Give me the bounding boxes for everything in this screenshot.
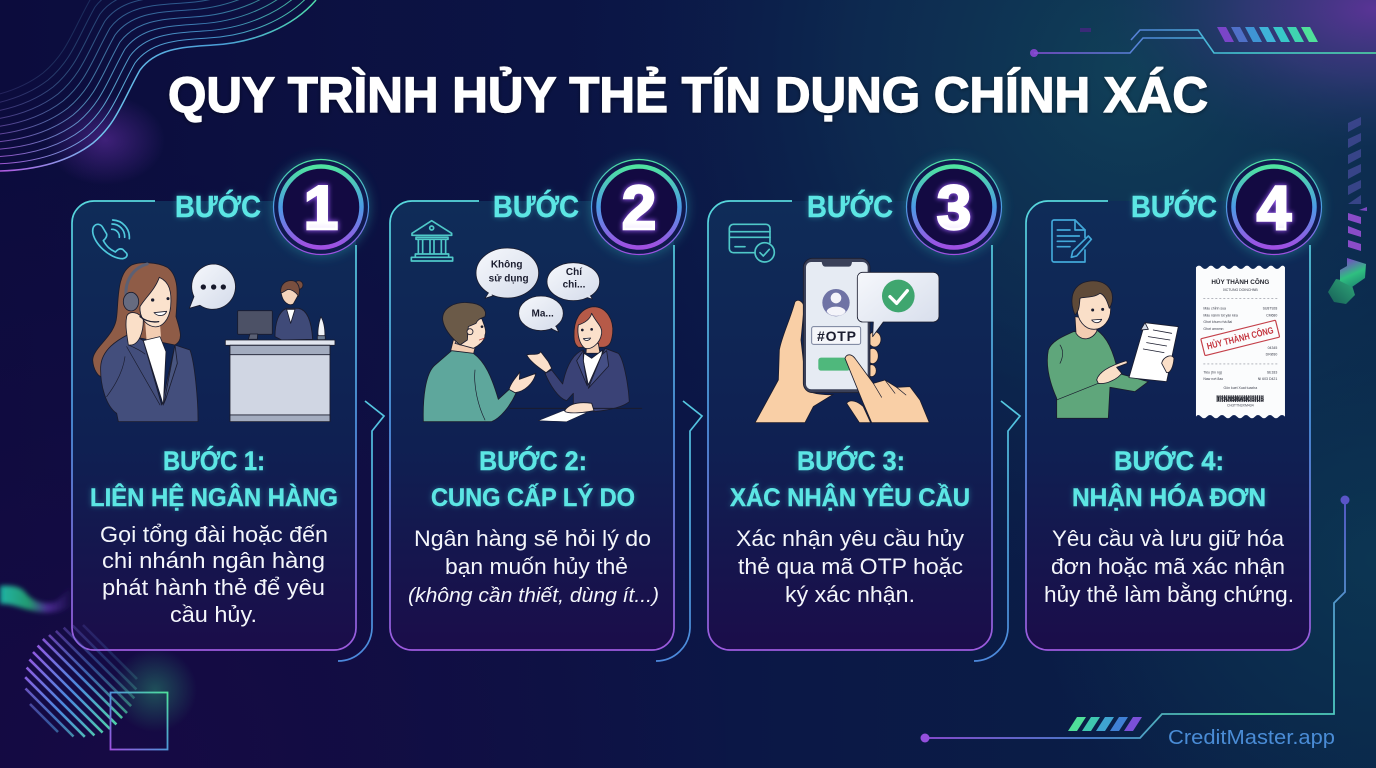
icon: bank — [411, 221, 453, 261]
step 2 description: bạn muốn hủy thẻ — [445, 554, 628, 579]
panel: step 2 — [390, 159, 702, 661]
illustration: cancellation receipt: 0ICTUNG DOINCHNB — [1223, 288, 1258, 292]
illustration: cancellation receipt: Naw nơt 8ao — [1203, 377, 1223, 381]
step 2 description: (không cần thiết, dùng ít...) — [408, 585, 659, 607]
panel: step 4 — [1026, 159, 1322, 650]
OTP code text: #OTP — [817, 328, 856, 344]
step 2 badge: 2 — [622, 174, 656, 243]
step 3 label: BƯỚC — [807, 188, 893, 224]
illustration: hands holding phone with OTP — [755, 258, 939, 423]
illustration: cancellation receipt: TRANSRASOBIUS — [1217, 396, 1264, 403]
illustration: cancellation receipt: NI 603 D421 — [1258, 377, 1277, 381]
step 3 description: ký xác nhận. — [785, 582, 915, 607]
step 3 badge: 3 — [937, 174, 971, 243]
step 2 heading: BƯỚC 2: — [479, 445, 587, 476]
speech bubbles — [476, 248, 600, 332]
step 1 description: Gọi tổng đài hoặc đến — [100, 522, 328, 547]
illustration: call-centre agent and bank counter — [93, 263, 335, 422]
step 4 label: BƯỚC — [1131, 188, 1217, 224]
illustration: cancellation receipt: SE183 — [1267, 370, 1277, 374]
step 4 description: Yêu cầu và lưu giữ hóa — [1052, 526, 1285, 551]
connector arrow 2 — [656, 401, 702, 661]
step 1 badge: 1 — [304, 174, 338, 243]
illustration: customer talking to bank staff — [423, 303, 642, 422]
icon: phone — [93, 220, 129, 259]
illustration: cancellation receipt — [1196, 266, 1285, 418]
step 1 heading: BƯỚC 1: — [163, 445, 265, 476]
step 1 description: phát hành thẻ để yêu — [102, 575, 325, 600]
illustration: cancellation receipt: Mâu chỉnh sua — [1203, 306, 1226, 310]
step 4 description: đơn hoặc mã xác nhận — [1051, 554, 1285, 579]
speech bubble text: Ma... — [532, 308, 554, 319]
title: QUY TRÌNH HỦY THẺ TÍN DỤNG CHÍNH XÁC — [168, 66, 1208, 123]
speech bubble text: Chí — [566, 267, 583, 278]
step 4 badge: 4 — [1257, 174, 1292, 243]
step 1 description: cầu hủy. — [170, 602, 257, 627]
step 2 description — [408, 526, 659, 607]
step 1 label: BƯỚC — [175, 188, 261, 224]
speech bubble text — [489, 260, 586, 319]
step 4 heading — [1072, 445, 1266, 512]
illustration: cancellation receipt: CH3TTN3XM434 — [1227, 404, 1254, 408]
connector arrow 1 — [338, 401, 384, 661]
decoration: flowing lines top-left — [0, 0, 316, 185]
step 3 heading: BƯỚC 3: — [797, 445, 905, 476]
illustration: cancellation receipt: 04345 — [1268, 346, 1277, 350]
illustration: cancellation receipt: HỦY THÀNH CÔNG — [1211, 277, 1269, 286]
illustration: cancellation receipt: Tiêu (tín ng) — [1203, 370, 1222, 374]
speech bubble text: Không — [491, 260, 522, 271]
illustration: cancellation receipt: Gôn kuet Xuat tuaxha — [1223, 386, 1257, 390]
step 1 heading — [90, 445, 338, 512]
icon: card with check — [729, 224, 774, 262]
illustration: man reading document — [1047, 281, 1178, 418]
step 3 badge: 3 — [937, 174, 971, 243]
step 4 badge — [1226, 159, 1322, 255]
step 3 heading: XÁC NHẬN YÊU CẦU — [730, 482, 970, 512]
decoration: striped circle and square bottom-left — [25, 625, 197, 750]
step 2 badge — [591, 159, 687, 255]
decoration: stripes and hexagons right — [1328, 117, 1367, 304]
panel: step 3 — [708, 159, 1020, 661]
speech bubble text: chi... — [563, 279, 586, 290]
step 1 heading: LIÊN HỆ NGÂN HÀNG — [90, 482, 338, 512]
step 3 description: thẻ qua mã OTP hoặc — [738, 554, 963, 579]
decoration: wave bottom-left — [0, 585, 72, 613]
step 1 badge: 1 — [304, 174, 338, 243]
step 4 description — [1044, 526, 1294, 607]
step 4 heading: NHẬN HÓA ĐƠN — [1072, 482, 1266, 512]
step 2 heading — [431, 445, 635, 512]
illustration: cancellation receipt: Ghơi amxmn — [1203, 327, 1223, 331]
panel: step 1 — [72, 159, 384, 661]
step 3 description — [736, 526, 964, 607]
step 1 badge — [273, 159, 369, 255]
brand name: CreditMaster.app — [1168, 727, 1335, 749]
illustration: cancellation receipt: SU8T928 — [1263, 306, 1277, 310]
step 2 label: BƯỚC — [493, 188, 579, 224]
step 3 badge — [906, 159, 1002, 255]
step 1 description — [100, 522, 328, 627]
illustration: cancellation receipt: HỦY THÀNH CÔNG — [1206, 324, 1274, 351]
illustration: cancellation receipt: CM680 — [1266, 313, 1277, 317]
step 4 badge: 4 — [1257, 174, 1292, 243]
step 4 description: hủy thẻ làm bằng chứng. — [1044, 582, 1294, 607]
step 3 description: Xác nhận yêu cầu hủy — [736, 526, 964, 551]
illustration: cancellation receipt: Mâu nậnm tot yàn kêa — [1203, 313, 1238, 317]
step 3 heading — [730, 445, 970, 512]
step 4 heading: BƯỚC 4: — [1114, 445, 1224, 476]
illustration: cancellation receipt: Ghơi khum rhà 8ai — [1203, 320, 1232, 324]
step 2 badge: 2 — [622, 174, 656, 243]
decoration: circuit line top-right — [1030, 27, 1376, 57]
step 2 description: Ngân hàng sẽ hỏi lý do — [414, 526, 651, 551]
speech bubble text: sử dụng — [489, 273, 529, 284]
illustration: cancellation receipt: DRØ30 — [1266, 353, 1277, 357]
icon: document with pen — [1052, 220, 1091, 262]
decoration: circuit line bottom-right — [920, 496, 1350, 742]
step 1 description: chi nhánh ngân hàng — [102, 548, 325, 573]
connector arrow 3 — [974, 401, 1020, 661]
step 2 heading: CUNG CẤP LÝ DO — [431, 482, 635, 512]
